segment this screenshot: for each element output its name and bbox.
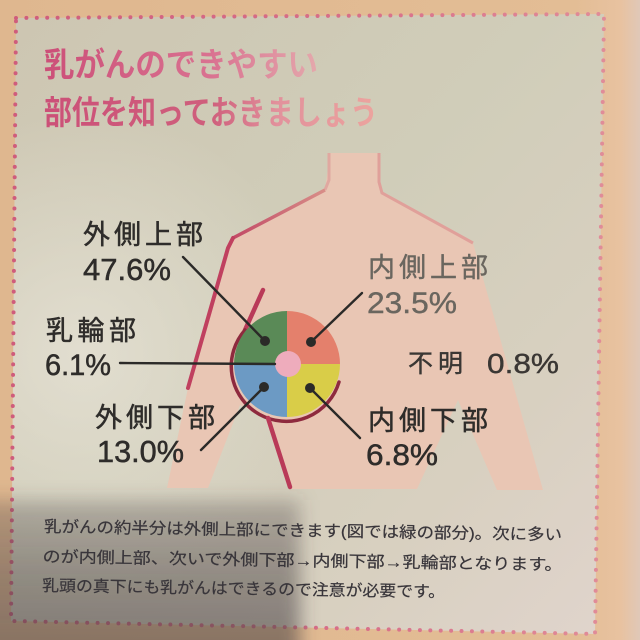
segment: upper outer (green) xyxy=(234,311,287,364)
title: 乳がんのできやすい xyxy=(44,46,318,83)
label: upper outer xyxy=(83,220,203,287)
segment: lower outer (blue) xyxy=(234,364,287,417)
label: upper outer: 外側上部 xyxy=(83,220,203,250)
label: upper inner: 内側上部 xyxy=(368,253,488,283)
label: unknown: 0.8% xyxy=(487,348,559,379)
label: lower inner: 内側下部 xyxy=(368,406,488,436)
title: 部位を知っておきましょう xyxy=(44,94,378,131)
label: upper outer: 47.6% xyxy=(83,252,171,287)
label: lower inner xyxy=(366,406,488,472)
body silhouette xyxy=(167,153,543,490)
label: nipple area: 乳輪部 xyxy=(46,316,136,346)
armpit and breast outline xyxy=(188,238,339,487)
label: nipple area: 6.1% xyxy=(45,349,111,382)
leader lines xyxy=(120,257,362,450)
label: lower inner: 6.8% xyxy=(366,439,438,472)
segment: upper inner (red) xyxy=(287,311,340,364)
label: unknown xyxy=(408,348,559,379)
title xyxy=(44,46,378,131)
segment: nipple area (pink) xyxy=(275,351,301,377)
body text: 乳頭の真下にも乳がんはできるので注意が必要です。 xyxy=(42,577,445,601)
body text: のが内側上部、次いで外側下部→内側下部→乳輪部となります。 xyxy=(42,548,563,574)
shoulder outline xyxy=(233,153,473,243)
segment: lower inner (yellow) xyxy=(287,364,340,417)
body text xyxy=(42,518,563,603)
body text: 乳がんの約半分は外側上部にできます(図では緑の部分)。次に多い xyxy=(44,518,562,544)
label: nipple area xyxy=(45,316,136,382)
pie chart: tumour sites xyxy=(234,311,340,417)
shadow across lower left xyxy=(0,500,300,640)
label: upper inner: 23.5% xyxy=(367,287,457,320)
label: upper inner xyxy=(367,253,488,320)
label: lower outer: 外側下部 xyxy=(95,403,215,433)
label: lower outer: 13.0% xyxy=(97,434,184,469)
label: unknown: 不明 xyxy=(408,350,463,378)
label: lower outer xyxy=(95,403,215,469)
